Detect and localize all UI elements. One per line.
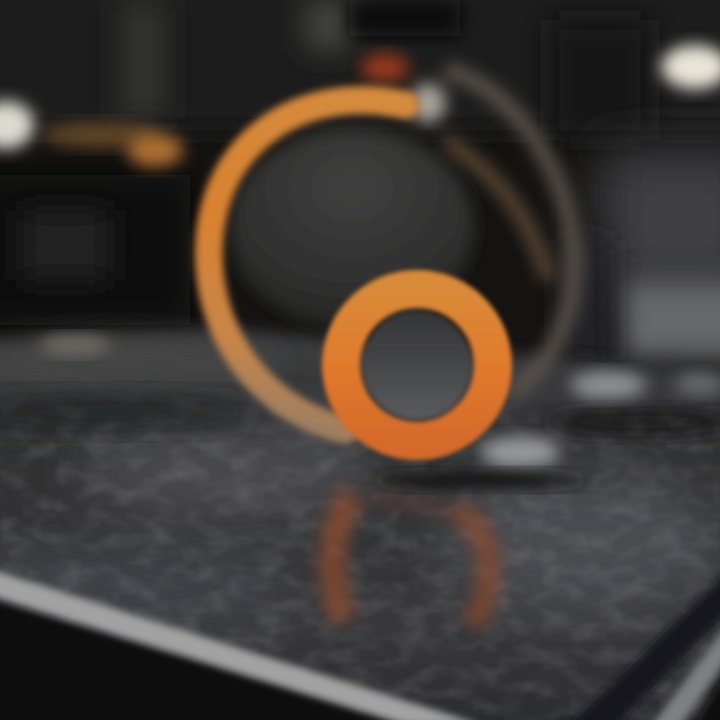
ring reflection on the table xyxy=(332,490,489,625)
icon: top left orange glow xyxy=(42,122,183,167)
table front edge and dark foreground xyxy=(0,560,720,720)
large orange ring xyxy=(209,100,405,430)
icon: top right white light xyxy=(661,45,720,89)
small orange ring xyxy=(341,289,493,441)
red clamp at the top of the ring xyxy=(361,53,409,83)
dark sphere behind the rings xyxy=(230,128,474,328)
large faint grey ring at back right xyxy=(410,70,574,395)
ring base highlight xyxy=(370,436,590,489)
metal table surface xyxy=(0,330,720,720)
icon: top left white light xyxy=(0,101,34,149)
